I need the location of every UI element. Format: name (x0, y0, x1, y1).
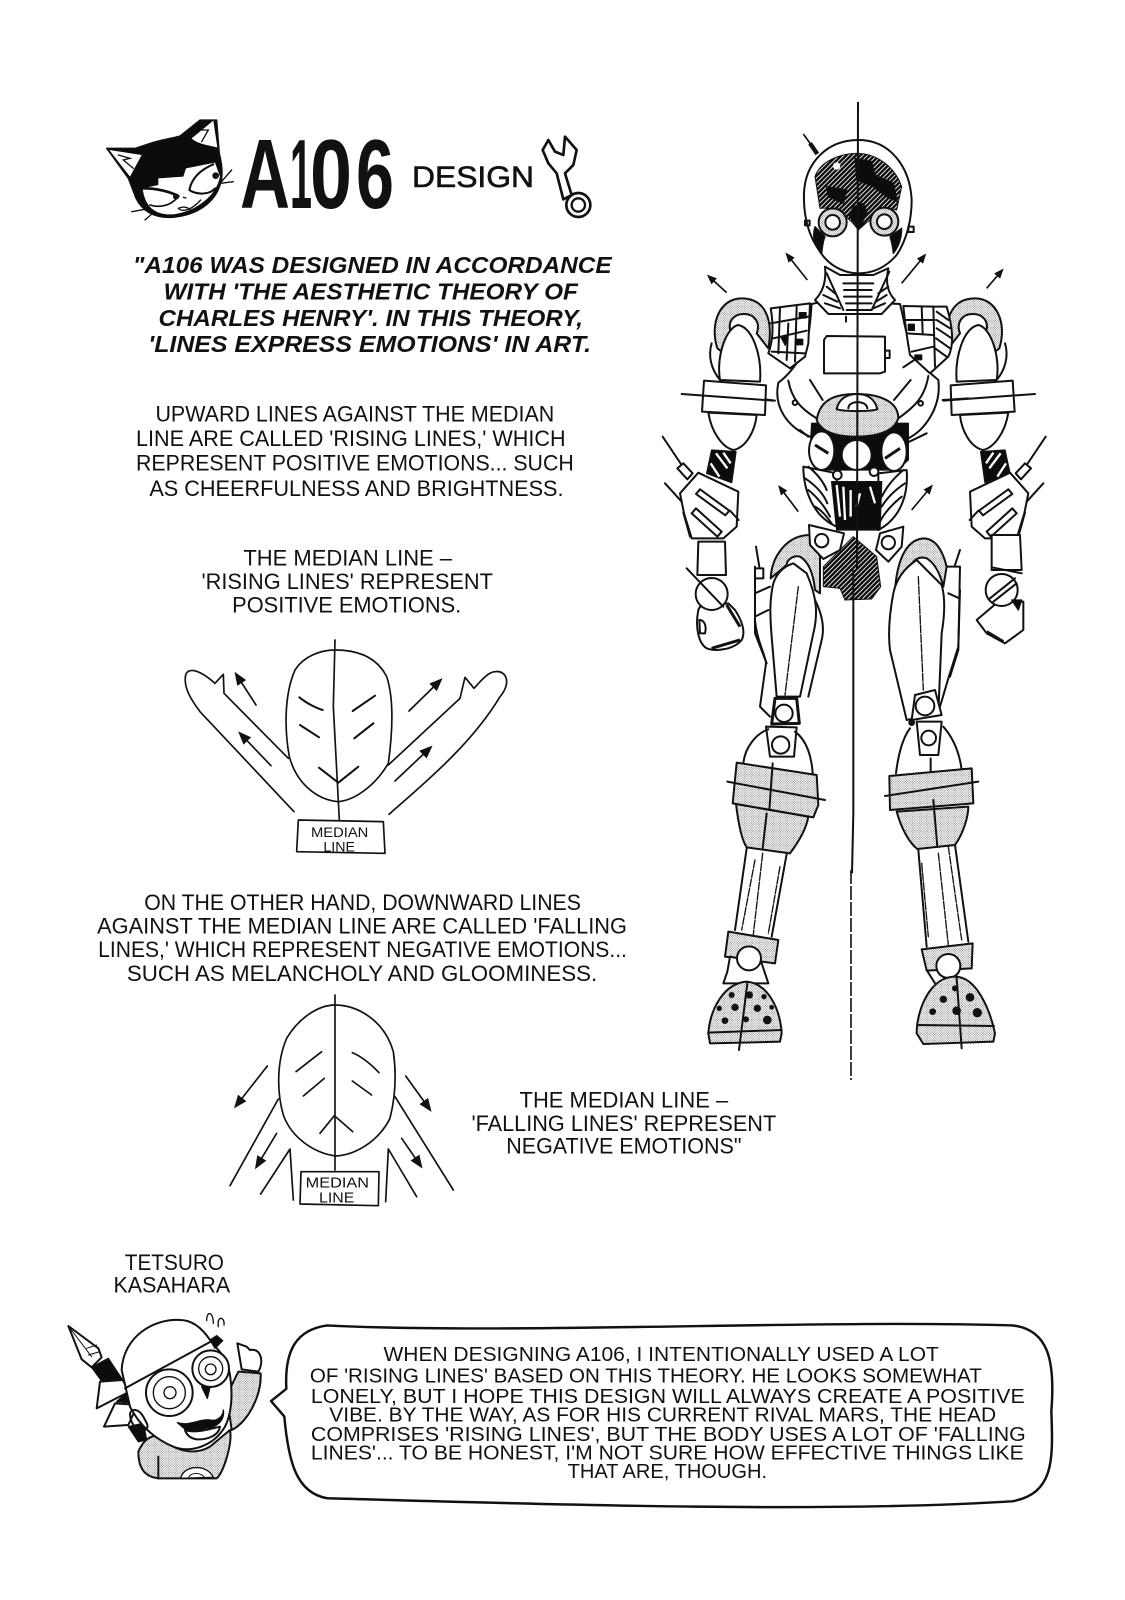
median line label (297, 820, 385, 854)
lower dashed median line (850, 870, 852, 1080)
paragraph: falling lines: SUCH AS MELANCHOLY AND GLOOMINESS. (127, 961, 597, 986)
title DESIGN: DESIGN (412, 161, 534, 194)
median line label: LINE (319, 1190, 355, 1206)
glasses band (125, 1338, 217, 1388)
right wing (388, 672, 507, 814)
diagram: falling lines face (230, 995, 453, 1206)
author caricature (68, 1314, 261, 1478)
right thigh (889, 560, 960, 720)
title A106: 6 (356, 119, 394, 229)
paragraph: falling lines: ON THE OTHER HAND, DOWNWARD LINES (144, 890, 581, 915)
left arm (663, 298, 773, 650)
glasses right (192, 1350, 229, 1387)
median line (332, 995, 337, 1170)
speech text: WHEN DESIGNING A106, I INTENTIONALLY USED A LOT (384, 1343, 939, 1366)
paragraph: rising lines (136, 401, 574, 501)
paragraph: falling lines: AGAINST THE MEDIAN LINE ARE CALLED 'FALLING (97, 914, 627, 939)
right wrist and fist (977, 535, 1023, 643)
diagram: rising lines face (185, 640, 507, 854)
torso (138, 1430, 230, 1478)
median line label: MEDIAN (311, 824, 368, 840)
right wing lines (386, 1097, 453, 1202)
caption: falling lines: 'FALLING LINES' REPRESENT (471, 1111, 776, 1136)
caption: falling lines: NEGATIVE EMOTIONS" (506, 1134, 741, 1159)
caption: rising lines: POSITIVE EMOTIONS. (232, 593, 461, 618)
facial lines (299, 696, 375, 783)
moustache and mouth (177, 1410, 224, 1439)
chest dome (817, 394, 898, 437)
eyes (143, 188, 178, 196)
left ankle and foot (708, 932, 782, 1050)
speech text: LINES'... TO BE HONEST, I'M NOT SURE HOW EFFECTIVE THINGS LIKE (311, 1441, 1024, 1464)
caption: rising lines: THE MEDIAN LINE – (243, 546, 453, 571)
speech bubble (271, 1324, 1052, 1507)
median line label (300, 1172, 379, 1206)
left wing (185, 670, 294, 812)
ear (130, 1410, 148, 1430)
lower median line (852, 570, 853, 873)
shoulder mechanism right (903, 306, 952, 373)
speech text: COMPRISES 'RISING LINES', BUT THE BODY USES A LOT OF 'FALLING (311, 1423, 1026, 1446)
head (122, 1320, 231, 1449)
sweat marks (207, 1314, 224, 1327)
title A106: 0 (310, 119, 352, 229)
speech text: LONELY, BUT I HOPE THIS DESIGN WILL ALWAYS CREATE A POSITIVE (311, 1385, 1025, 1408)
author name: KASAHARA (114, 1273, 230, 1298)
face (143, 163, 220, 214)
left hip (755, 535, 820, 663)
icon: wrench (543, 137, 590, 217)
torso (765, 301, 968, 442)
left wrist and fist (687, 542, 743, 650)
facial lines (296, 1052, 379, 1133)
left shin band (733, 763, 818, 817)
right ankle and foot (917, 943, 995, 1048)
rising arrows (708, 254, 1002, 512)
title A106: A (240, 119, 290, 229)
eyes (819, 208, 847, 236)
paragraph: rising lines: LINE ARE CALLED 'RISING LINES,' WHICH (136, 426, 566, 451)
median line (333, 640, 339, 820)
caption: rising lines (201, 546, 493, 618)
left calf (727, 729, 825, 940)
median line label: MEDIAN (306, 1176, 369, 1192)
speech text: VIBE. BY THE WAY, AS FOR HIS CURRENT RIVAL MARS, THE HEAD (329, 1404, 996, 1427)
right knee (908, 690, 942, 755)
intro quote: 'LINES EXPRESS EMOTIONS' IN ART. (148, 331, 591, 357)
left ear (109, 150, 142, 177)
arrows (236, 674, 441, 781)
paragraph: rising lines: UPWARD LINES AGAINST THE MEDIAN (155, 401, 554, 426)
upper median line (857, 102, 858, 570)
paragraph: rising lines: REPRESENT POSITIVE EMOTIONS... SUCH (136, 450, 574, 475)
face outline (279, 1005, 395, 1156)
helmet shading (815, 153, 902, 230)
intro quote: CHARLES HENRY'. IN THIS THEORY, (159, 305, 583, 331)
caption: rising lines: 'RISING LINES' REPRESENT (201, 569, 493, 594)
left wing lines (230, 1099, 293, 1200)
speech text: OF 'RISING LINES' BASED ON THIS THEORY. HE LOOKS SOMEWHAT (310, 1365, 982, 1388)
intro quote (133, 252, 613, 357)
right shin band (889, 768, 973, 810)
left thigh (755, 563, 823, 717)
left knee (766, 698, 799, 757)
robot legs (708, 560, 995, 1050)
caption: falling lines (471, 1088, 776, 1159)
right arm (943, 298, 1046, 643)
raised arm (226, 1343, 261, 1430)
right hip (895, 538, 960, 677)
mouth and whiskers (118, 122, 233, 220)
abdomen mechanism (803, 423, 908, 530)
right calf (885, 727, 978, 947)
title A106: 1 (290, 119, 312, 229)
arrows (236, 1066, 430, 1167)
speech text (310, 1343, 1026, 1483)
right ear (192, 121, 217, 147)
intro quote: WITH 'THE AESTHETIC THEORY OF (164, 279, 578, 305)
pelvis plate right (876, 527, 903, 562)
author name: TETSURO (125, 1250, 224, 1275)
pelvis plate left (809, 525, 844, 559)
shoulder mechanism left (768, 303, 810, 368)
antenna (803, 134, 817, 153)
cat mascot icon (107, 120, 233, 220)
head (803, 134, 914, 273)
pen nib (68, 1326, 147, 1442)
paragraph: rising lines: AS CHEERFULNESS AND BRIGHTNESS. (149, 476, 564, 501)
paragraph: falling lines (97, 890, 627, 986)
crotch (823, 537, 881, 600)
title A106 (240, 119, 394, 229)
neck (815, 267, 895, 314)
glasses left (146, 1369, 193, 1416)
median line label: LINE (323, 838, 355, 854)
face outline (286, 650, 392, 802)
chest battery (824, 336, 890, 373)
speech text: THAT ARE, THOUGH. (568, 1460, 767, 1483)
robot figure (663, 134, 1046, 677)
paragraph: falling lines: LINES,' WHICH REPRESENT NEGATIVE EMOTIONS... (98, 937, 627, 962)
caption: falling lines: THE MEDIAN LINE – (520, 1088, 729, 1113)
author name (114, 1250, 230, 1298)
intro quote: "A106 WAS DESIGNED IN ACCORDANCE (133, 252, 613, 278)
